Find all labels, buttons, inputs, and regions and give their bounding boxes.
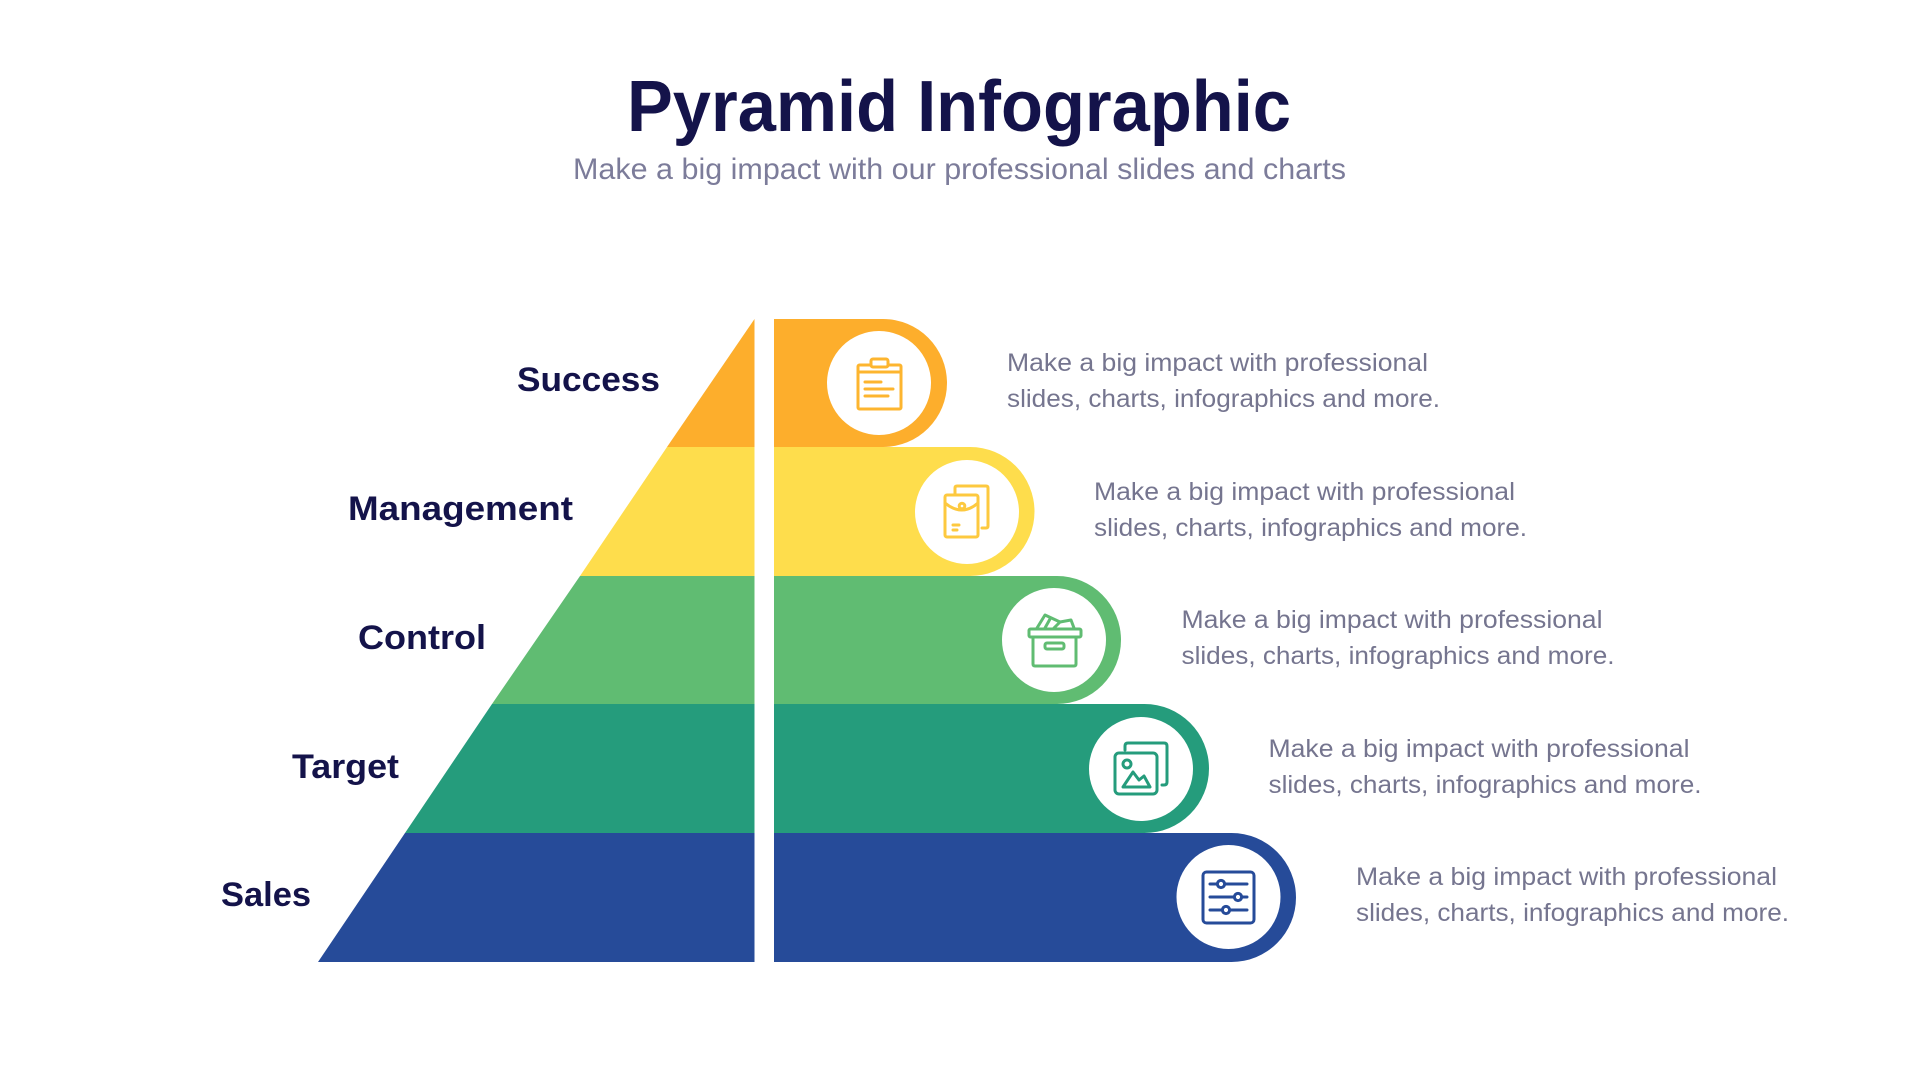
label: Success: Success	[517, 361, 660, 399]
pill bar: Success	[774, 319, 947, 447]
icon circle: clipboard	[827, 331, 931, 435]
title: Pyramid Infographic	[627, 67, 1291, 147]
subtitle: Make a big impact with our professional slides and charts	[573, 153, 1346, 186]
pill bar: Control	[774, 576, 1121, 704]
pyramid segment: Management	[580, 447, 754, 576]
description: Target: slides, charts, infographics and more.	[1268, 771, 1702, 799]
label: Target: Target	[292, 748, 399, 786]
description: Success: slides, charts, infographics and more.	[1007, 385, 1440, 413]
tier: Sales	[221, 833, 1789, 962]
tier: Control	[358, 576, 1614, 704]
tier: Success	[517, 319, 1440, 447]
pill bar: Sales	[774, 833, 1296, 962]
description: Target: Make a big impact with professional	[1268, 735, 1690, 763]
tier: Management	[348, 447, 1527, 576]
icon circle: images	[1089, 717, 1193, 821]
label: Control: Control	[358, 619, 486, 657]
description: Success: Make a big impact with professional	[1007, 349, 1428, 377]
description: Management: slides, charts, infographics and more.	[1094, 514, 1527, 542]
pill bar: Target	[774, 704, 1209, 833]
pill bar: Management	[774, 447, 1034, 576]
description: Sales: Make a big impact with professional	[1356, 863, 1777, 891]
pyramid segment: Sales	[318, 833, 754, 962]
description: Control: Make a big impact with professional	[1182, 606, 1602, 634]
icon circle: sliders	[1176, 845, 1280, 949]
pyramid segment: Target	[405, 704, 754, 833]
tier: Target	[292, 704, 1702, 833]
icon circle: envelopes	[915, 460, 1019, 564]
pyramid segment: Control	[492, 576, 754, 704]
description: Management: Make a big impact with professional	[1094, 478, 1515, 506]
description: Control: slides, charts, infographics and more.	[1182, 642, 1614, 670]
label: Sales: Sales	[221, 876, 311, 914]
description: Sales: slides, charts, infographics and more.	[1356, 899, 1789, 927]
pyramid segment: Success	[667, 319, 754, 447]
label: Management: Management	[348, 490, 573, 528]
icon circle: box	[1002, 588, 1106, 692]
